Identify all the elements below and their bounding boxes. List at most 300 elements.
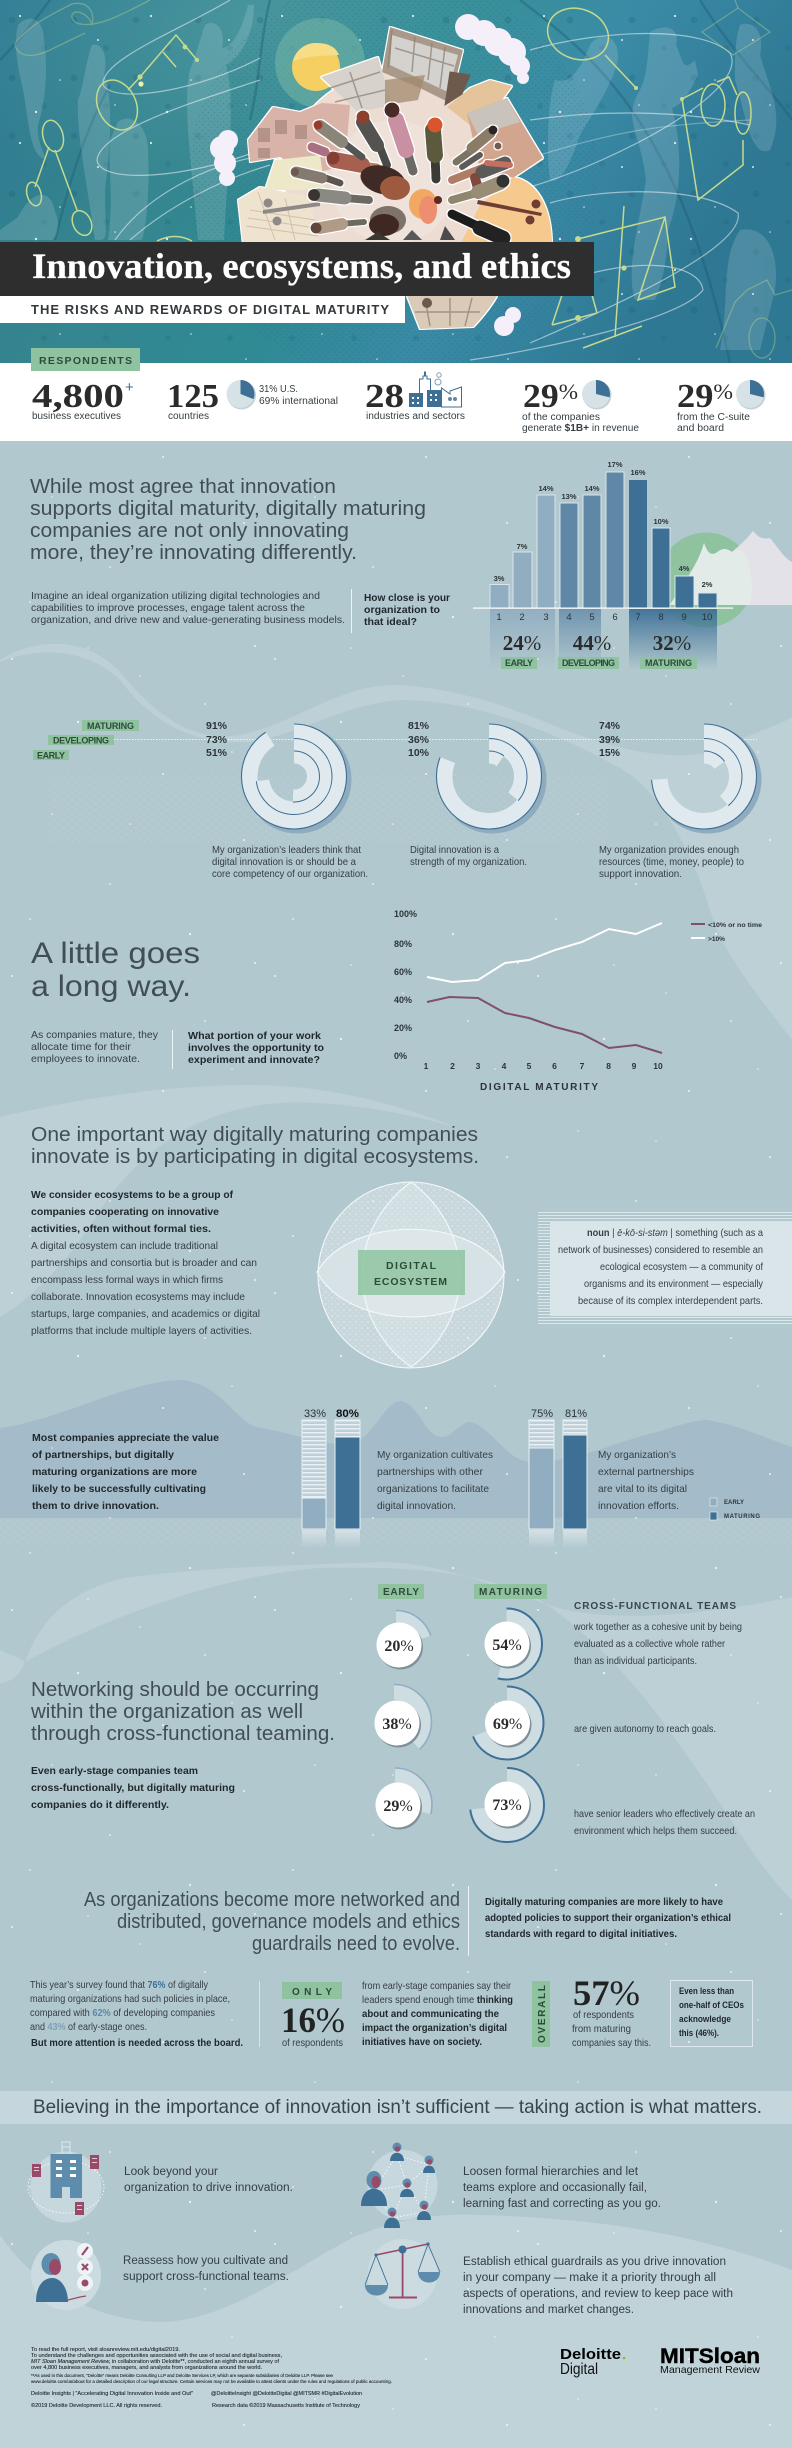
footer text: Deloitte Insights | “Accelerating Digital Innovation Inside and Out” <box>31 2391 193 2397</box>
ecosystem definition text: platforms that include multiple layers of activities. <box>31 1326 252 1337</box>
heading: networking <box>30 1678 335 1745</box>
stat: 57 percent: companies say this. <box>572 2038 651 2049</box>
bars: cultivates partnerships: 33% <box>304 1408 326 1420</box>
axis numbers: 5 <box>589 612 595 623</box>
axis numbers: 9 <box>681 612 687 623</box>
logo: Deloitte Digital <box>560 2346 625 2378</box>
donut: maturing 54 percent <box>471 1608 542 1680</box>
logo: MIT Sloan Management Review: Management Review <box>660 2364 760 2376</box>
subtitle bar: THE RISKS AND REWARDS OF DIGITAL MATURITY <box>31 302 389 317</box>
value labels: 14% <box>538 484 554 493</box>
legend: early and maturing: EARLY <box>724 1500 744 1506</box>
donut: maturing 54 percent: 54% <box>492 1637 522 1654</box>
partnerships text: likely to be successfully cultivating <box>32 1484 206 1495</box>
footer text: www.deloitte.com/us/about for a detailed description of our legal structure. Certain services may not be available to attest clients under the rules and regulations of public accounting. <box>31 2379 392 2384</box>
text: survey findings: This year’s survey found that 76% of digitally <box>30 1980 209 1991</box>
caption: partnerships with other <box>377 1467 484 1478</box>
tag: digital ecosystem: ECOSYSTEM <box>374 1276 447 1288</box>
donut: maturing 69 percent: 69% <box>493 1716 522 1733</box>
question: portion of work: What portion of your work <box>188 1031 321 1042</box>
question: organization to <box>364 605 440 616</box>
caption: digital innovation is or should be a <box>212 857 356 868</box>
text: survey findings: compared with 62% of developing companies <box>30 2008 215 2019</box>
value labels: 16% <box>630 468 646 477</box>
footer text: **As used in this document, “Deloitte” means Deloitte Consulting LLP and Deloitte Services LP, which are separate subsidiaries of Deloitte LLP. Please see <box>31 2373 333 2378</box>
text: loosen hierarchies <box>463 2166 661 2210</box>
ecosystem definition text: startups, large companies, and academics or digital <box>31 1309 260 1320</box>
values: 15% <box>599 748 620 759</box>
respondents stats band <box>0 348 792 441</box>
caption: Digital innovation is a <box>410 845 499 856</box>
heading: governance <box>84 1888 460 1955</box>
axis numbers <box>496 612 712 623</box>
text: survey findings: maturing organizations had such policies in place, <box>30 1994 230 2005</box>
value labels: 14% <box>584 484 600 493</box>
icon: circle and mountain decoration <box>658 531 792 628</box>
text: early stage companies: companies do it differently. <box>31 1800 169 1811</box>
x axis labels <box>424 1061 663 1071</box>
y axis labels: 20% <box>394 1023 412 1033</box>
axis numbers: 2 <box>519 612 525 623</box>
stat: only 16 percent: 16% <box>281 2000 345 2040</box>
footer text: @DeloitteInsight @DeloitteDigital @MITSMR #DigitalEvolution <box>211 2391 362 2397</box>
ecosystem definition text: companies cooperating on innovative <box>31 1207 219 1218</box>
question: portion of work: involves the opportunity to <box>188 1043 324 1054</box>
ecosystem definition text: We consider ecosystems to be a group of <box>31 1190 234 1201</box>
text: companies mature <box>31 1030 159 1065</box>
values: 91% <box>206 721 227 732</box>
tag: respondents <box>31 348 140 371</box>
section: innovation heading: companies are not only innovating <box>30 519 349 542</box>
people <box>291 102 510 238</box>
stat: only 16 percent: ONLY <box>292 1987 332 1998</box>
y axis labels: 80% <box>394 939 412 949</box>
bar reflections <box>302 1530 587 1548</box>
stat: only 16 percent: of respondents <box>282 2038 343 2049</box>
x axis labels: 10 <box>653 1061 663 1071</box>
caption: resources (time, money, people) to <box>599 857 744 868</box>
stat: 29 percent of the companies: of the companies <box>522 412 600 423</box>
value labels: 10% <box>653 517 669 526</box>
value labels: 13% <box>561 492 577 501</box>
donut: maturing 73 percent: 73% <box>492 1797 522 1814</box>
legend: early and maturing <box>710 1498 760 1520</box>
callout: CEOs: acknowledge <box>679 2014 731 2024</box>
x axis labels: 6 <box>552 1061 557 1071</box>
text: autonomy: are given autonomy to reach goals. <box>574 1724 716 1735</box>
stat: 29 percent from the c-suite <box>677 378 766 434</box>
globe: digital ecosystem <box>317 1182 505 1368</box>
value labels: 7% <box>517 542 528 551</box>
text: cross-functional teams: work together as a cohesive unit by being <box>573 1622 742 1633</box>
stat: business executives <box>32 378 134 422</box>
stat: 29 percent from the c-suite: and board <box>677 423 724 434</box>
text: early stage companies <box>31 1766 235 1811</box>
text: policies <box>485 1897 731 1940</box>
x axis labels: 2 <box>450 1061 455 1071</box>
radial chart: core competency <box>206 721 368 880</box>
heading: governance: guardrails need to evolve. <box>252 1932 460 1955</box>
values: 36% <box>408 735 429 746</box>
x axis labels: 8 <box>606 1061 611 1071</box>
logo: MIT Sloan Management Review: MITSloan <box>660 2345 760 2368</box>
text: policies: standards with regard to digital initiatives. <box>485 1929 677 1940</box>
stat: business executives: business executives <box>32 411 121 422</box>
stat: countries with pie: 31% U.S. <box>259 384 298 395</box>
text: cross-functional teams <box>573 1601 742 1667</box>
text: survey findings: But more attention is needed across the board. <box>31 2038 243 2049</box>
y axis labels: 100% <box>394 909 417 919</box>
question: portion of work <box>188 1031 324 1066</box>
x axis labels: 1 <box>424 1061 429 1071</box>
text: ethical guardrails: Establish ethical guardrails as you drive innovation <box>463 2256 726 2268</box>
text: loosen hierarchies: teams explore and occasionally fail, <box>463 2182 647 2194</box>
caption <box>599 845 744 880</box>
x axis labels: 4 <box>502 1061 507 1071</box>
halftone around planet <box>188 0 598 383</box>
donut: maturing 73 percent <box>470 1768 544 1842</box>
tag: digital ecosystem <box>358 1250 465 1295</box>
heading: governance: distributed, governance models and ethics <box>117 1910 460 1933</box>
text: ethical guardrails: aspects of operations, and review to keep pace with <box>463 2288 733 2300</box>
value labels: 17% <box>607 460 623 469</box>
bar chart: digital maturity distribution: EARLY <box>505 658 533 668</box>
tag: overall: OVERALL <box>537 1985 548 2043</box>
text: survey findings: and 43% of early-stage ones. <box>30 2022 147 2033</box>
donut: early 20 percent <box>360 1610 432 1684</box>
text: policies: Digitally maturing companies are more likely to have <box>485 1897 723 1908</box>
stage shares: 32% <box>653 631 691 655</box>
text: loosen hierarchies: learning fast and correcting as you go. <box>463 2198 661 2210</box>
partnerships text: Most companies appreciate the value <box>32 1433 219 1444</box>
x axis labels: 5 <box>527 1061 532 1071</box>
line: under 10 percent <box>427 997 662 1053</box>
sun <box>275 18 365 108</box>
stat: 29 percent of the companies: % <box>559 379 578 404</box>
values: 81% <box>408 721 429 732</box>
axis numbers: 10 <box>702 612 712 623</box>
column tags: MATURING <box>479 1587 542 1598</box>
radial legend: EARLY <box>37 750 65 760</box>
heading: networking: within the organization as well <box>30 1700 303 1723</box>
planet of buildings and people <box>238 27 552 329</box>
text: look beyond: organization to drive innovation. <box>124 2182 293 2194</box>
bars: cultivates partnerships: 80% <box>336 1408 359 1420</box>
panel: ecosystem definition: organisms and its environment — especially <box>584 1279 764 1290</box>
values: 10% <box>408 748 429 759</box>
orbit ribbons <box>97 0 750 360</box>
callout: CEOs: one-half of CEOs <box>679 2000 744 2010</box>
text: early-stage leaders: impact the organization’s digital <box>362 2023 507 2034</box>
clouds <box>210 14 530 336</box>
footer text: MIT Sloan Management Review, in collaboration with Deloitte**, conducted an eighth annual survey of <box>31 2359 279 2365</box>
caption: core competency of our organization. <box>212 869 368 880</box>
stat: 57 percent: from maturing <box>572 2024 631 2035</box>
partnerships text: maturing organizations are more <box>32 1467 197 1478</box>
caption: support innovation. <box>599 869 682 880</box>
stat: 29 percent from the c-suite: % <box>713 379 733 404</box>
radial chart: resources <box>599 721 758 880</box>
bars: external partnerships <box>529 1408 694 1529</box>
icon: buildings network <box>28 2142 104 2222</box>
heading: digital ecosystems: One important way digitally maturing companies <box>31 1123 478 1146</box>
icon: person with tools <box>31 2240 101 2310</box>
panel: ecosystem definition: noun | ē-kō-si-stəm | something (such as a <box>587 1228 763 1239</box>
stat: business executives: + <box>125 379 134 396</box>
values <box>408 721 429 759</box>
caption: My organization’s <box>598 1450 676 1461</box>
panel: ecosystem definition: network of businesses) considered to resemble an <box>558 1245 763 1256</box>
text: policies: adopted policies to support their organization’s ethical <box>485 1913 731 1924</box>
caption: strength of my organization. <box>410 857 527 868</box>
caption: organizations to facilitate <box>377 1484 489 1495</box>
y axis labels: 60% <box>394 967 412 977</box>
intro text: capabilities to improve processes, engage talent across the <box>31 603 305 614</box>
icon: balance scales <box>365 2239 440 2309</box>
stage shares <box>503 631 691 655</box>
bar chart: digital maturity distribution: DEVELOPING <box>562 658 615 668</box>
question <box>364 593 450 628</box>
radial legend: DEVELOPING <box>53 736 109 746</box>
intro text <box>31 591 345 626</box>
title: Innovation, ecosystems, and ethics <box>32 246 571 286</box>
text: ethical guardrails <box>463 2256 733 2316</box>
axis title: DIGITAL MATURITY <box>480 1082 598 1093</box>
stage tags <box>501 657 537 669</box>
stat: countries with pie: countries <box>168 411 209 422</box>
speckle band <box>50 773 610 843</box>
stat: industries and sectors with city icon <box>365 372 465 422</box>
section: innovation heading: supports digital maturity, digitally maturing <box>30 497 426 520</box>
donut: maturing 69 percent <box>470 1686 544 1760</box>
stat: countries with pie <box>167 378 338 422</box>
footer text: To read the full report, visit sloanreview.mit.edu/digital2019. <box>31 2347 180 2353</box>
text: early-stage leaders: leaders spend enough time thinking <box>362 1995 513 2006</box>
question: portion of work: experiment and innovate? <box>188 1055 320 1066</box>
question: How close is your <box>364 593 450 604</box>
text: senior leaders: environment which helps them succeed. <box>574 1826 737 1837</box>
text: reassess: support cross-functional teams. <box>123 2271 289 2283</box>
banner: taking action: Believing in the importance of innovation isn’t sufficient — taking action is what matters. <box>33 2096 762 2118</box>
text: reassess <box>123 2255 289 2283</box>
banner: taking action <box>0 2091 792 2124</box>
stat: 29 percent of the companies: generate $1B+ in revenue <box>522 423 639 434</box>
ecosystem definition text: partnerships and consortia but is broader and can <box>31 1258 257 1269</box>
caption: My organization provides enough <box>599 845 739 856</box>
values: 73% <box>206 735 227 746</box>
panel: ecosystem definition: because of its complex interdependent parts. <box>578 1296 763 1307</box>
section: innovation heading <box>30 475 426 564</box>
y axis labels <box>394 909 417 1061</box>
tag: respondents: RESPONDENTS <box>39 355 132 367</box>
question: that ideal? <box>364 617 417 628</box>
axis numbers: 7 <box>635 612 641 623</box>
ecosystem definition text: encompass less formal ways in which firms <box>31 1275 223 1286</box>
stat: business executives: 4,800 <box>32 378 124 415</box>
x axis labels: 3 <box>476 1061 481 1071</box>
stars <box>0 0 792 363</box>
text: cross-functional teams: than as individual participants. <box>574 1656 697 1667</box>
legend <box>691 922 762 943</box>
ecosystem definition text: collaborate. Innovation ecosystems may include <box>31 1292 245 1303</box>
caption <box>598 1450 694 1512</box>
text: companies mature: allocate time for their <box>31 1042 132 1053</box>
text: ethical guardrails: in your company — make it a priority through all <box>463 2272 716 2284</box>
text: early-stage leaders <box>362 1981 513 2048</box>
caption <box>377 1450 493 1512</box>
footer text <box>31 2347 392 2409</box>
caption <box>410 845 527 868</box>
donut: early 20 percent: 20% <box>384 1638 414 1655</box>
x axis labels: 9 <box>632 1061 637 1071</box>
value labels: 2% <box>702 580 713 589</box>
callout: CEOs: Even less than <box>679 1986 734 1996</box>
axis numbers: 1 <box>496 612 502 623</box>
text: companies mature: employees to innovate. <box>31 1054 140 1065</box>
axis numbers: 4 <box>566 612 572 623</box>
mountain band <box>0 1380 792 1546</box>
text: survey findings <box>30 1980 243 2049</box>
intro text: Imagine an ideal organization utilizing digital technologies and <box>31 591 320 602</box>
bars: external partnerships: 81% <box>565 1408 587 1420</box>
text: loosen hierarchies: Loosen formal hierarchies and let <box>463 2166 639 2178</box>
radial legend <box>33 720 757 760</box>
column tags <box>378 1584 547 1599</box>
text: early stage companies: Even early-stage companies team <box>31 1766 198 1777</box>
logo: Deloitte Digital: Digital <box>560 2361 598 2378</box>
stat: only 16 percent <box>281 1982 345 2049</box>
axis numbers: 8 <box>658 612 664 623</box>
legend: early and maturing: MATURING <box>724 1514 760 1520</box>
heading: a little goes a long way <box>31 937 200 1003</box>
footer text: ©2019 Deloitte Development LLC. All rights reserved. <box>31 2402 162 2409</box>
legend: <10% or no time <box>708 922 762 929</box>
stat: 29 percent of the companies <box>522 378 639 434</box>
text: early-stage leaders: initiatives have on society. <box>362 2037 482 2048</box>
stat: industries and sectors with city icon: 28 <box>365 378 404 415</box>
ecosystem definition text: activities, often without formal ties. <box>31 1224 211 1235</box>
stat: 29 percent from the c-suite: 29 <box>677 378 711 415</box>
ecosystem definition text <box>31 1190 260 1337</box>
text: senior leaders <box>574 1809 755 1837</box>
bars: cultivates partnerships <box>302 1408 493 1529</box>
subtitle bar <box>0 296 405 323</box>
stat: 29 percent from the c-suite: from the C-suite <box>677 412 750 423</box>
heading: networking: through cross-functional teaming. <box>31 1722 335 1745</box>
y axis labels: 0% <box>394 1051 407 1061</box>
values: 51% <box>206 748 227 759</box>
gradient bands below axis <box>490 609 555 670</box>
footer text: To understand the challenges and opportunities associated with the use of social and digital business, <box>31 2353 282 2359</box>
stat: countries with pie: 69% international <box>259 396 338 407</box>
icon: people network <box>361 2142 438 2228</box>
stat: 29 percent of the companies: 29 <box>523 378 557 415</box>
caption: My organization cultivates <box>377 1450 493 1461</box>
legend: >10% <box>708 936 725 943</box>
values <box>206 721 227 759</box>
footer text: Research data ©2019 Massachusetts Institute of Technology <box>212 2402 360 2409</box>
text: early-stage leaders: from early-stage companies say their <box>362 1981 512 1992</box>
values: 74% <box>599 721 620 732</box>
hero illustration <box>0 0 792 383</box>
heading: a little goes a long way: A little goes <box>31 937 200 970</box>
stage shares: 44% <box>573 631 611 655</box>
heading: networking: Networking should be occurring <box>31 1678 319 1701</box>
text: reassess: Reassess how you cultivate and <box>123 2255 288 2267</box>
donut: early 38 percent: 38% <box>382 1716 412 1733</box>
radial chart: strength <box>408 721 544 868</box>
logo: MIT Sloan Management Review <box>660 2345 760 2376</box>
section: innovation heading: more, they’re innovating differently. <box>30 541 357 564</box>
scales weights <box>477 200 542 224</box>
text: look beyond <box>124 2166 293 2194</box>
heading: digital ecosystems <box>31 1123 479 1168</box>
caption: digital innovation. <box>377 1501 456 1512</box>
text: cross-functional teams: evaluated as a collective whole rather <box>574 1639 726 1650</box>
value labels <box>494 460 713 589</box>
constellations <box>24 0 751 348</box>
caption: innovation efforts. <box>598 1501 679 1512</box>
title bar <box>0 242 594 296</box>
partnerships text: them to drive innovation. <box>32 1501 159 1512</box>
bar chart: digital maturity distribution: MATURING <box>645 658 692 668</box>
ecosystem definition text: A digital ecosystem can include traditional <box>31 1241 218 1252</box>
line chart: time to innovate <box>394 909 762 1093</box>
panel: ecosystem definition: ecological ecosystem — a community of <box>600 1262 763 1273</box>
stat: industries and sectors with city icon: industries and sectors <box>366 411 465 422</box>
silhouettes of people <box>0 5 776 350</box>
text: early-stage leaders: about and communicating the <box>362 2009 499 2020</box>
bar chart: digital maturity distribution <box>473 460 733 670</box>
bars <box>490 472 717 608</box>
stat: 57 percent: of respondents <box>573 2010 634 2021</box>
value labels: 4% <box>679 564 690 573</box>
values <box>599 721 620 759</box>
bars: external partnerships: 75% <box>531 1408 553 1420</box>
caption <box>212 845 368 880</box>
x axis labels: 7 <box>580 1061 585 1071</box>
stat: 57 percent <box>572 1973 651 2049</box>
value labels: 3% <box>494 574 505 583</box>
callout: CEOs <box>670 1980 752 2046</box>
building pieces <box>286 72 498 242</box>
text: senior leaders: have senior leaders who effectively create an <box>574 1809 755 1820</box>
text: look beyond: Look beyond your <box>124 2166 218 2178</box>
values: 39% <box>599 735 620 746</box>
stat: countries with pie: 125 <box>167 378 219 415</box>
partnerships text <box>32 1433 219 1512</box>
radial legend: MATURING <box>87 721 134 731</box>
heading: digital ecosystems: innovate is by participating in digital ecosystems. <box>31 1145 479 1168</box>
background swooshes <box>0 644 792 2448</box>
stat: 57 percent: 57% <box>573 1973 640 2013</box>
logo: Deloitte Digital: Deloitte <box>560 2346 621 2363</box>
callout: CEOs: this (46%). <box>679 2028 719 2038</box>
tag: digital ecosystem: DIGITAL <box>386 1260 437 1272</box>
tag: overall <box>532 1981 550 2047</box>
axis numbers: 6 <box>612 612 618 623</box>
heading: a little goes a long way: a long way. <box>31 970 191 1003</box>
line: more than 10 percent <box>427 923 662 982</box>
donut: early 29 percent: 29% <box>383 1798 413 1815</box>
caption: My organization’s leaders think that <box>212 845 361 856</box>
intro text: organization, and drive new and value-generating business models. <box>31 615 345 626</box>
heading: governance: As organizations become more networked and <box>84 1888 460 1911</box>
donut: early 38 percent <box>356 1684 432 1760</box>
y axis labels: 40% <box>394 995 412 1005</box>
text: cross-functional teams: CROSS-FUNCTIONAL TEAMS <box>574 1601 736 1612</box>
axis numbers: 3 <box>543 612 549 623</box>
